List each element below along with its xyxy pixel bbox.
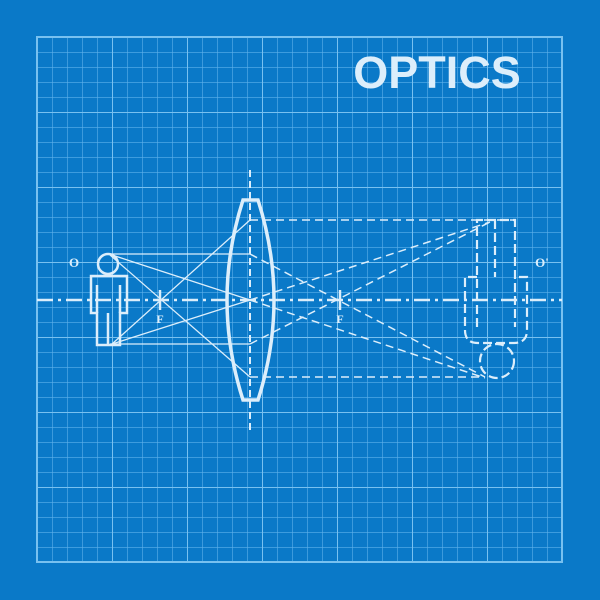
object rays xyxy=(108,220,250,377)
focal point right: F xyxy=(336,312,344,326)
focal point left: F xyxy=(156,312,164,326)
title: OPTICS xyxy=(353,47,521,98)
lens xyxy=(227,200,274,400)
image: inverted person (dashed) xyxy=(465,220,527,378)
lens axis xyxy=(249,170,251,430)
optical axis xyxy=(37,299,562,301)
label O': O' xyxy=(535,255,549,270)
object: person xyxy=(91,254,127,345)
focal point left xyxy=(156,290,164,326)
label O: O xyxy=(69,255,79,270)
image rays (dashed) xyxy=(250,220,515,378)
focal point right xyxy=(336,290,344,326)
